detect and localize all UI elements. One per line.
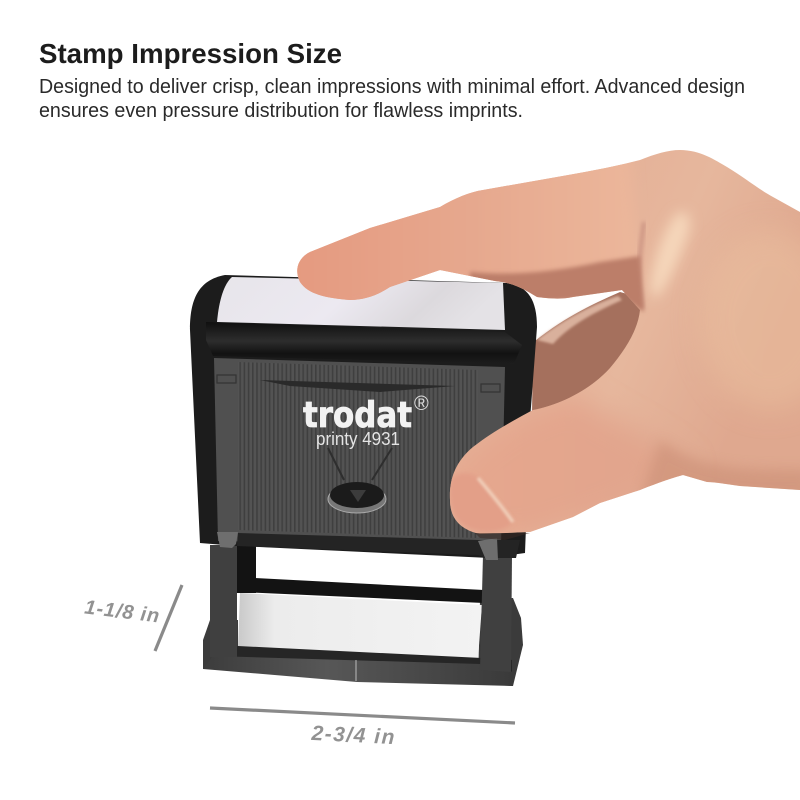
guide lines to dial <box>328 448 392 480</box>
description text <box>39 76 745 122</box>
dimension: height label: 1-1/8 in <box>83 597 160 627</box>
middle finger highlight <box>537 296 622 344</box>
corner tabs <box>217 532 498 560</box>
right base wall <box>478 598 523 686</box>
left leg <box>210 545 237 657</box>
title: Stamp Impression Size <box>39 38 342 69</box>
dark bottom rim <box>237 533 520 558</box>
dimension: width label: 2-3/4 in <box>310 722 395 749</box>
thumbnail <box>450 474 508 530</box>
white top label <box>217 277 505 330</box>
small rectangular marks <box>217 375 500 392</box>
lower palm crease shade <box>644 444 800 490</box>
right leg <box>480 555 512 672</box>
stamp body shell <box>190 275 537 558</box>
front panel <box>214 358 505 547</box>
registered mark: ® <box>414 393 429 415</box>
left base wall <box>203 620 238 669</box>
ribbed panel <box>238 362 478 538</box>
front face of base <box>203 656 513 686</box>
thumb shadow on lower rim <box>475 533 530 540</box>
wrist tone <box>718 243 800 403</box>
front top strip <box>213 646 512 672</box>
thumb tone <box>450 401 676 534</box>
shading inside hand <box>280 150 800 540</box>
top slot <box>260 380 455 392</box>
stamp <box>190 275 537 686</box>
brand logo: trodat <box>303 395 412 436</box>
base seam <box>355 660 357 681</box>
paper visible through frame <box>238 593 482 659</box>
glossy band <box>206 322 522 364</box>
knuckle highlight <box>651 212 690 297</box>
stamp legs and base <box>203 545 523 686</box>
date dial <box>328 482 386 513</box>
description text: ensures even pressure distribution for flawless imprints. <box>39 100 523 122</box>
palm shadow behind the stamp <box>530 292 650 420</box>
hand <box>280 150 800 540</box>
description text: Designed to deliver crisp, clean impressions with minimal effort. Advanced design <box>39 76 745 98</box>
dimension: height line <box>155 585 182 651</box>
dimension: width line <box>210 708 515 723</box>
thumbnail edge <box>478 478 513 522</box>
knuckle crease <box>639 222 644 308</box>
underside of index finger <box>470 256 644 312</box>
back bar <box>238 560 484 603</box>
back of hand and fingers <box>297 150 800 534</box>
index finger tone <box>297 162 633 300</box>
model name: printy 4931 <box>316 429 400 449</box>
white gap beside stamp <box>522 345 533 416</box>
